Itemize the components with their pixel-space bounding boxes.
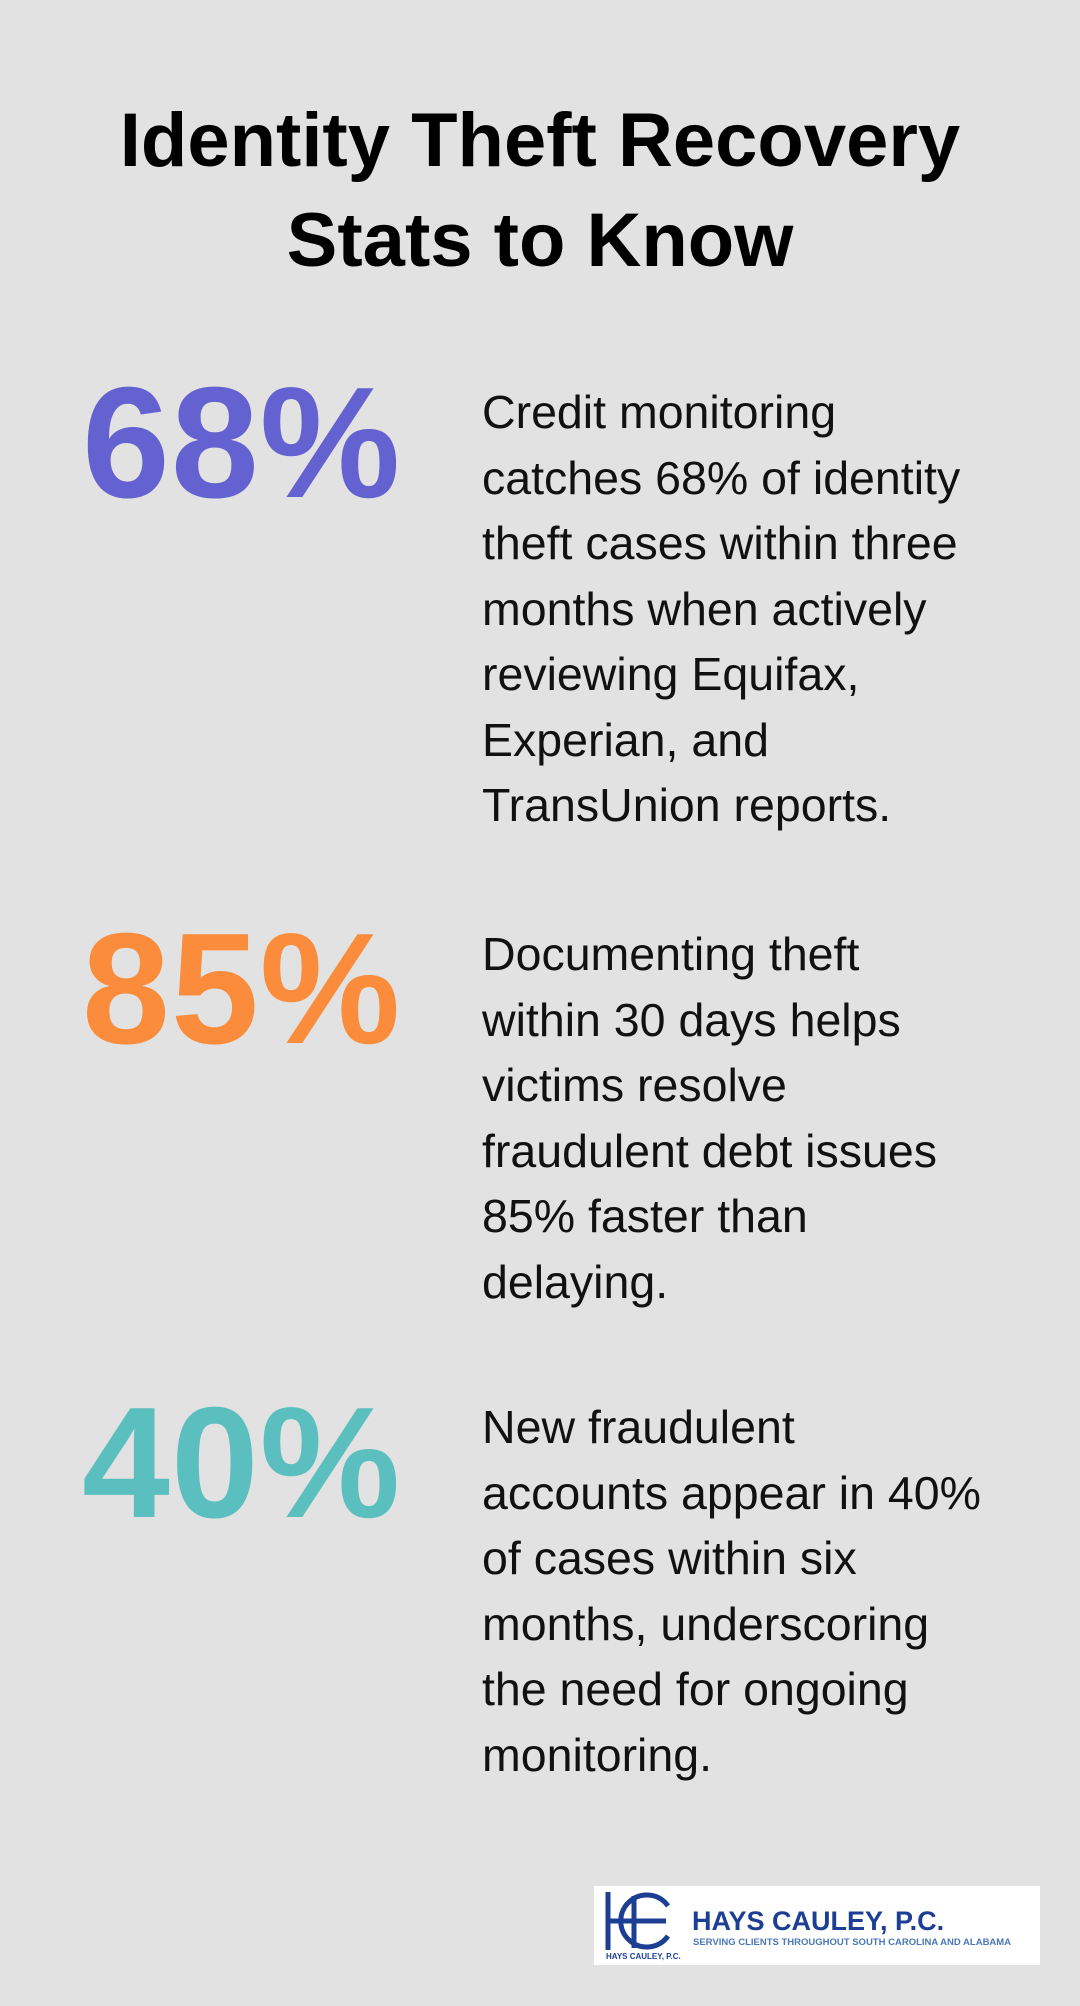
stat 2 text: fraudulent debt issues — [482, 1124, 937, 1176]
logo — [594, 1886, 1040, 1965]
logo tagline: SERVING CLIENTS THROUGHOUT SOUTH CAROLINA AND ALABAMA — [693, 1937, 1011, 1948]
title: Identity Theft Recovery — [120, 98, 960, 183]
stat 3 number: 40% — [82, 1375, 401, 1551]
stat 3 text: accounts appear in 40% — [482, 1466, 981, 1518]
stat 1 text: months when actively — [482, 582, 927, 634]
stat 3 text: of cases within six — [482, 1532, 857, 1584]
stat 1 text: reviewing Equifax, — [482, 648, 859, 700]
stat 2 text: delaying. — [482, 1256, 668, 1308]
stat 1 text: theft cases within three — [482, 517, 958, 569]
stat 2 text: Documenting theft — [482, 928, 859, 980]
stat 2 text: 85% faster than — [482, 1190, 808, 1242]
logo name: HAYS CAULEY, P.C. — [692, 1906, 944, 1936]
stat 2 text: within 30 days helps — [482, 994, 901, 1046]
stat 3 text: New fraudulent — [482, 1401, 795, 1453]
stat 3 text: months, underscoring — [482, 1598, 929, 1650]
stat 1 text: TransUnion reports. — [482, 779, 891, 831]
stat 3 text: monitoring. — [482, 1728, 712, 1780]
stat 1 text: Credit monitoring — [482, 386, 836, 438]
icon: HC monogram — [606, 1892, 670, 1950]
stat 1 text: catches 68% of identity — [482, 452, 960, 504]
title — [120, 98, 960, 283]
stat 1 number: 68% — [82, 355, 401, 531]
logo small caption: HAYS CAULEY, P.C. — [606, 1952, 681, 1961]
stat 3 text — [482, 1401, 981, 1780]
stat 1 text — [482, 386, 960, 831]
stat 1 text: Experian, and — [482, 714, 769, 766]
title: Stats to Know — [287, 198, 793, 283]
stat 3 text: the need for ongoing — [482, 1663, 909, 1715]
stat 2 text — [482, 928, 937, 1308]
stat 2 number: 85% — [82, 901, 401, 1077]
stat 2 text: victims resolve — [482, 1059, 787, 1111]
